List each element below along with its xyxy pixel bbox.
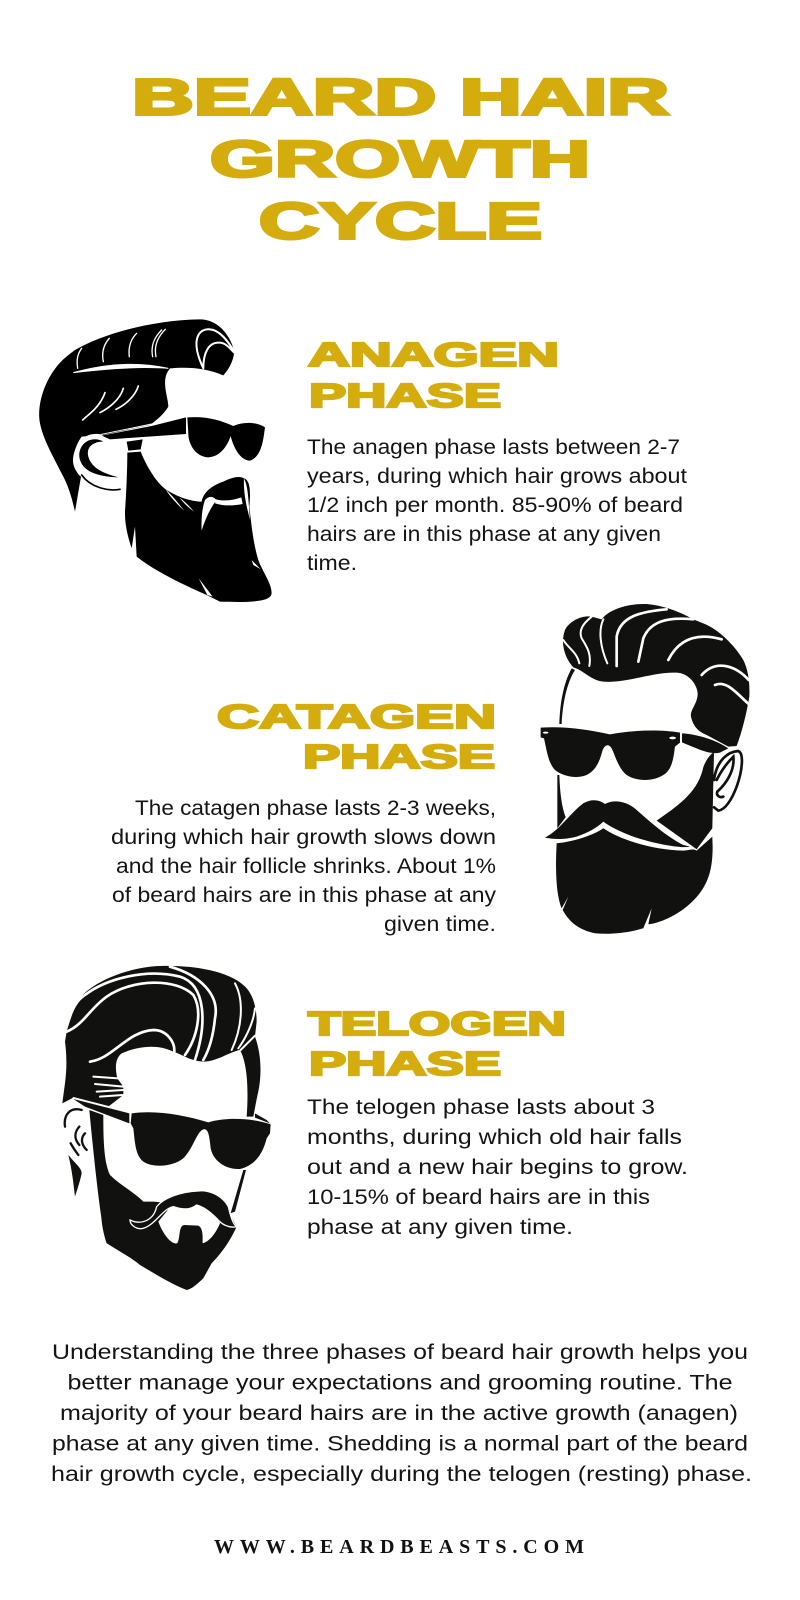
text block: closing summary: phase at any given time. Shedding is a normal part of the beard <box>52 1432 748 1456</box>
beard <box>125 452 272 602</box>
text block: catagen description: of beard hairs are in this phase at any <box>112 883 496 907</box>
heading: anagen phase: ANAGEN <box>308 337 559 374</box>
heading: catagen phase: CATAGEN <box>217 699 496 736</box>
text block: catagen description: The catagen phase lasts 2-3 weeks, <box>135 796 496 820</box>
title: GROWTH <box>210 130 590 188</box>
sunglasses <box>73 1099 271 1169</box>
beard <box>556 753 714 934</box>
text block: anagen description: years, during which hair grows about <box>307 464 687 488</box>
ear <box>714 751 742 811</box>
text block: anagen description: The anagen phase lasts between 2-7 <box>307 435 680 459</box>
text block: catagen description: during which hair growth slows down <box>111 825 496 849</box>
text block: closing summary: majority of your beard hairs are in the active growth (anagen) <box>60 1401 738 1425</box>
sunglasses <box>541 727 728 780</box>
heading: telogen phase: PHASE <box>309 1046 501 1083</box>
panel: catagen phase <box>111 604 749 936</box>
text block: anagen description: time. <box>307 551 357 575</box>
text block: telogen description: out and a new hair begins to grow. <box>307 1155 688 1179</box>
text block: catagen description: given time. <box>384 912 496 936</box>
icon: bearded man front with sunglasses and moustache <box>541 604 749 934</box>
title: CYCLE <box>259 192 542 250</box>
heading: anagen phase <box>308 337 559 415</box>
text block: anagen description <box>307 435 687 575</box>
heading: catagen phase: PHASE <box>303 739 495 776</box>
text block: telogen description: The telogen phase lasts about 3 <box>307 1095 655 1119</box>
text block: closing summary: Understanding the three phases of beard hair growth helps you <box>52 1340 748 1364</box>
ear <box>73 434 127 490</box>
ear <box>65 1109 87 1197</box>
title: BEARD HAIR <box>132 68 669 126</box>
text block: telogen description: phase at any given time. <box>307 1215 573 1239</box>
text block: telogen description <box>307 1095 688 1239</box>
text block: telogen description: months, during which old hair falls <box>307 1125 682 1149</box>
beard and moustache <box>89 1110 246 1290</box>
text block: telogen description: 10-15% of beard hairs are in this <box>307 1185 650 1209</box>
text block: closing summary <box>51 1340 752 1486</box>
text block: catagen description: and the hair follicle shrinks. About 1% <box>116 854 496 878</box>
heading: anagen phase: PHASE <box>309 378 501 415</box>
moustache <box>545 800 690 847</box>
footer: website url: WWW.BEARDBEASTS.COM <box>214 1536 584 1558</box>
sunglasses <box>102 417 265 461</box>
title <box>132 68 669 250</box>
panel: anagen phase <box>39 319 687 602</box>
text block: catagen description <box>111 796 496 936</box>
panel: telogen phase <box>62 966 688 1290</box>
icon: bearded man three-quarter with sunglasses and goatee <box>62 966 271 1290</box>
heading: telogen phase <box>308 1006 566 1083</box>
heading: telogen phase: TELOGEN <box>308 1006 566 1043</box>
text block: closing summary: better manage your expectations and grooming routine. The <box>68 1370 732 1394</box>
text block: anagen description: hairs are in this phase at any given <box>307 522 661 546</box>
text block: closing summary: hair growth cycle, especially during the telogen (resting) phase. <box>51 1462 752 1486</box>
text block: anagen description: 1/2 inch per month. 85-90% of beard <box>307 493 683 517</box>
heading: catagen phase <box>217 699 496 776</box>
icon: bearded man profile with sunglasses <box>39 319 272 602</box>
